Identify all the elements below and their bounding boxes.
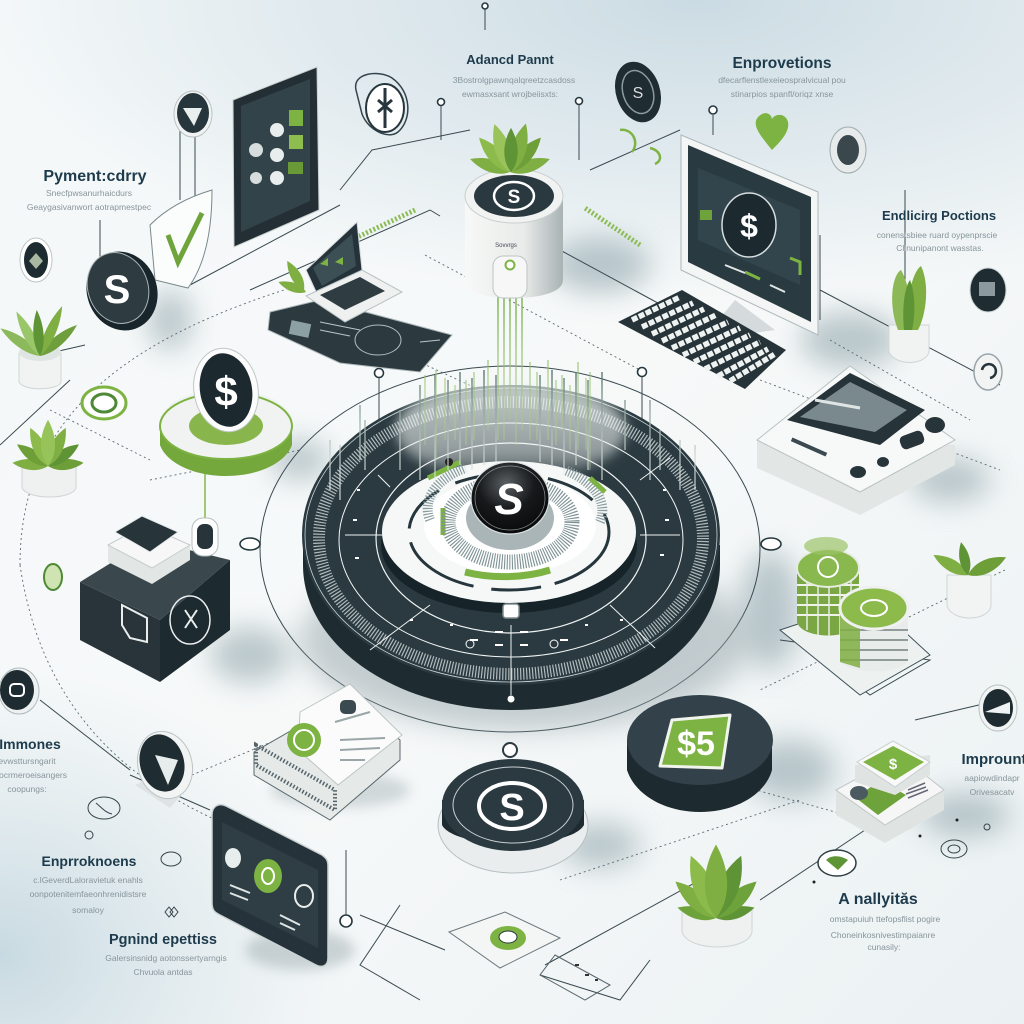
text: Payment category: Snecfpwsanurhaicdurs [46,188,132,198]
text: Enprovetions: dfecarflenstlexeieospralvicual pou [718,75,846,85]
text: Advanced Paint [453,52,575,99]
plant pot bottom [670,844,762,947]
text: Payment category: Geaygasivanwort aotrapmestpec [27,202,152,212]
dark button with S [438,743,588,873]
text: Immones: coopungs: [7,784,47,794]
desktop monitor [681,135,818,335]
text: Enprovetions: stinarpios spanfl/oriqz xnse [731,89,834,99]
icon: right edge badge [979,685,1017,731]
icon: small green coin [44,564,62,590]
small square node [503,604,519,618]
icon: heart and top coins [607,56,866,173]
icon: small badge left [20,238,52,282]
inner white disc [381,477,637,613]
knob [466,486,554,550]
small icon green ring right bottom [812,818,990,884]
text: Enprovetions: Enprovetions [732,55,832,72]
plant pot left top [0,304,80,389]
icon: coins right side [970,268,1006,390]
security cube [80,516,230,682]
icon: green small coin [82,387,126,419]
text: Ending Portions: Clinunipanont wasstas. [896,243,984,253]
text: Enprorknens [30,853,147,915]
text: Analytics: Choneinkosnivestimpaianre [831,930,935,940]
stacked green cards: $ [889,756,898,773]
text: Advanced Paint: 3Bostrolgpawnqalqreetzcasdoss [453,75,575,85]
text: Enprorknens: Enprroknoens [42,853,137,869]
stacked green cards [836,741,944,843]
green platform with dollar badge [159,343,293,476]
text: Analytics: omstapuiuh ttefopsflist pogire [830,914,941,924]
veil over top of dial [396,380,626,480]
keyboard [618,290,786,389]
card with data [268,300,452,372]
tablet bottom left [212,805,355,970]
text: Payment category: Pyment:cdrry [43,168,147,185]
icon: heart and top coins: S [633,85,643,102]
text: Ending Portions: conenstsbiee ruard oypenprscie [877,230,998,240]
desktop monitor: $ [740,208,758,244]
icon: shield coin top left [174,91,212,137]
text: Immones [0,736,67,794]
top cylinder with plant: S [508,187,520,208]
green platform with dollar badge: $ [214,368,238,415]
text: Payment category [27,168,152,212]
open report book [254,684,410,820]
icon: seed badge [356,74,408,135]
text: Pgnind epetties: Chvuola antdas [133,967,193,977]
small outline icons bottom left [85,797,181,917]
dial tick ring [319,402,703,674]
text: Enprorknens: somaloy [72,905,105,915]
settlement terminal [757,366,955,515]
text: Enprorknens: c.lGeverdLaloravietuk enahls [33,875,143,885]
top cylinder with plant [465,121,563,298]
top cylinder with plant: Sovvrgs [495,243,517,249]
plant pot left middle [12,420,84,497]
coin left: S [104,268,130,312]
icon: navigation coin bottom left [130,725,200,808]
small green button bottom [449,912,610,1000]
plant pot right bottom [930,541,1009,618]
text: Imprount: aapiowdindapr [964,773,1020,783]
dial base [303,545,720,710]
plant pot right top [889,266,929,362]
laptop [277,222,402,322]
text: Analytics [830,891,941,952]
text: Ending Portions: Endlicirg Poctions [882,208,996,223]
outer ring pins [240,3,781,927]
text: Imprount [962,751,1024,797]
panel: central dial: S [494,475,524,524]
plant [468,121,552,178]
dark puck with green badge: $5 [677,725,715,763]
text: Pgnind epetties: Galersinsnidg aotonssertyarngis [105,953,227,963]
coin left [75,241,169,341]
text: Analytics: cunasily: [867,942,901,952]
text: Immones: Immones [0,736,61,752]
tablet top left [233,67,319,247]
text: Pgnind epetties: Pgnind epettiss [109,932,217,948]
text: Enprovetions [718,55,846,99]
text: Analytics: A nallyităs [838,891,918,908]
panel: central dial [300,380,750,730]
text: Immones: evwsttursngarit [0,756,56,766]
icon: left edge badge [0,668,39,714]
text: Advanced Paint: Adancd Pannt [466,52,554,67]
soft shadows [148,237,1010,867]
dark puck with green badge [627,695,773,812]
green coin stacks [780,537,930,695]
text: Advanced Paint: ewmasxsant wrojbeiisxts: [462,89,558,99]
document with checkmark [150,190,212,288]
text: Immones: ocrmeroeisangers [0,770,67,780]
text: Ending Portions [877,208,998,253]
text: Enprorknens: oonpotenitemfaeonhrenidistsre [30,889,147,899]
dark button with S: S [499,787,525,829]
green data beams [330,262,695,500]
text: Imprount: Orivesacatv [970,787,1015,797]
text: Pgnind epetties [105,932,227,977]
